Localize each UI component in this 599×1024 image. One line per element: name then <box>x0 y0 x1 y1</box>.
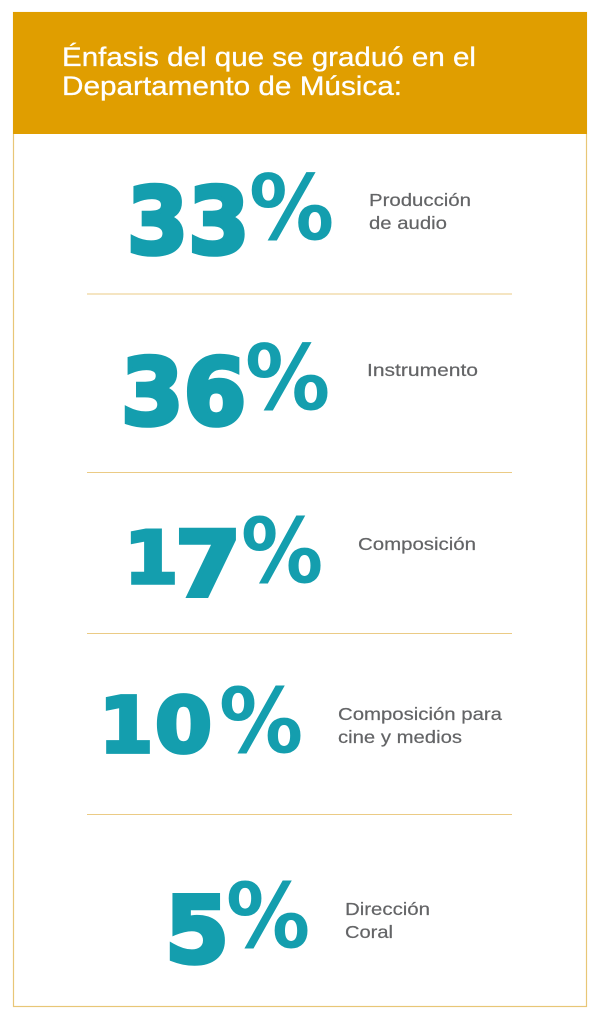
number 1: 1 <box>124 516 178 600</box>
number 1: 1 <box>99 681 153 771</box>
label: Composición para <box>338 704 502 724</box>
percent sign: % <box>219 668 303 774</box>
percent sign: % <box>249 156 334 261</box>
stat: 5% Dirección Coral <box>165 863 430 984</box>
label: Instrumento <box>367 360 478 380</box>
number 5: 5 <box>165 877 229 984</box>
stat: 17% Composición <box>124 499 476 617</box>
divider <box>87 633 512 634</box>
stat: 5% Dirección Coral: Coral <box>345 922 393 942</box>
percent sign: % <box>226 863 310 969</box>
stat: 33% Producción de audio <box>127 156 471 275</box>
divider <box>87 294 512 295</box>
stat: 10% Composición para cine y medios <box>99 668 502 774</box>
title <box>62 42 476 101</box>
title: Énfasis del que se graduó en el <box>62 42 476 72</box>
percent sign: % <box>241 499 323 604</box>
stat: 33% Producción de audio: de audio <box>369 213 447 233</box>
number 7: 7 <box>175 512 241 617</box>
label: Producción <box>369 190 471 210</box>
number 33: 33 <box>127 168 249 275</box>
stat: 36% Instrumento <box>121 326 478 446</box>
number 36: 36 <box>121 340 246 446</box>
divider <box>87 472 512 473</box>
label: Composición <box>358 534 476 554</box>
number 0: 0 <box>155 680 212 770</box>
header band <box>13 12 587 134</box>
percent sign: % <box>245 326 330 431</box>
stat: 10% Composición para cine y medios: cine y medios <box>338 727 462 747</box>
divider <box>87 814 512 815</box>
label: Dirección <box>345 899 430 919</box>
title: Departamento de Música: <box>62 71 402 101</box>
